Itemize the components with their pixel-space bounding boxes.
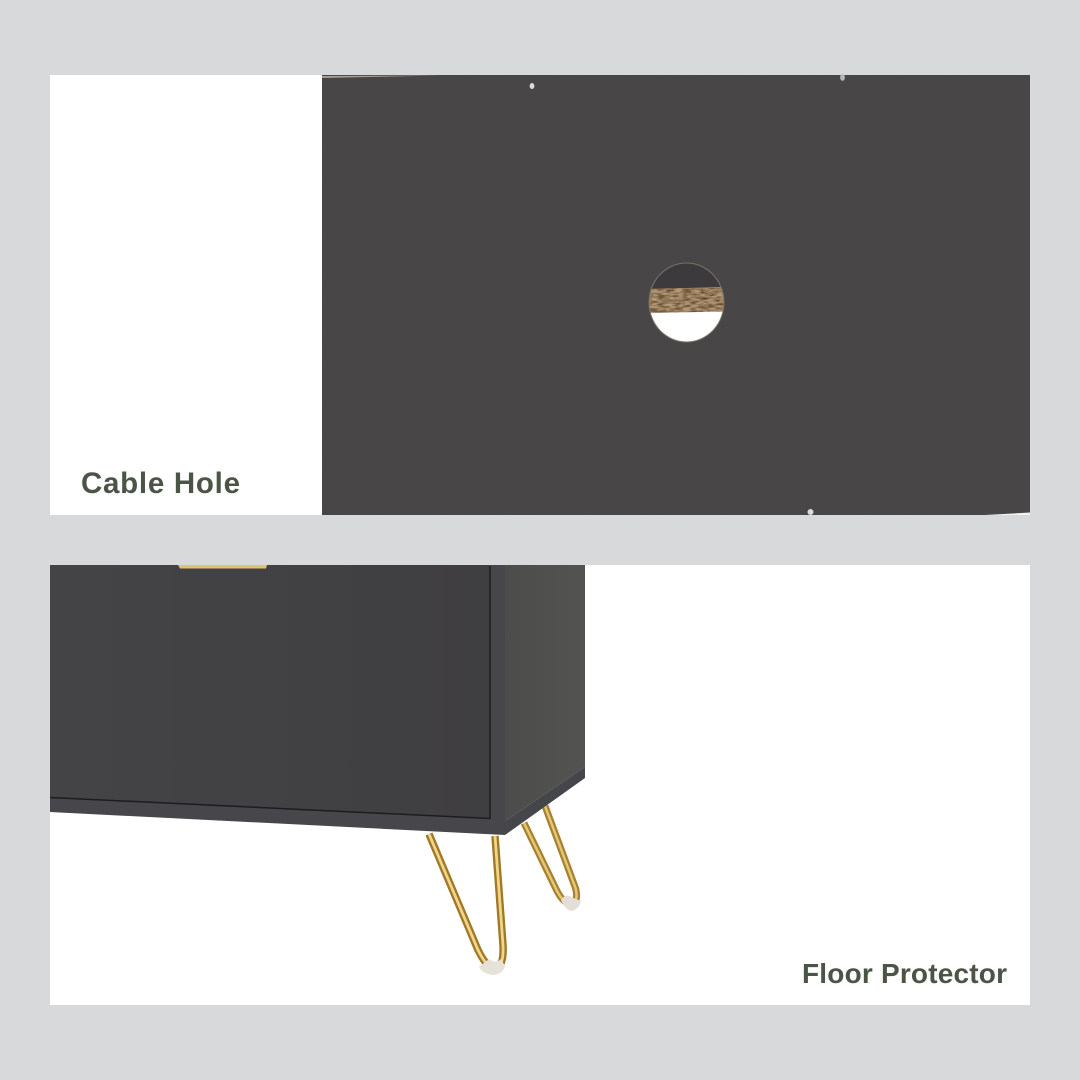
cabinet side lower edge (505, 767, 585, 835)
heading: Cable Hole: Cable Hole (81, 467, 240, 500)
panel: cable hole (50, 74, 1030, 515)
icon: cable hole (648, 262, 724, 342)
panel: floor protector (50, 565, 1030, 1005)
dark cabinet back (322, 75, 1030, 515)
cabinet frame (50, 565, 505, 835)
white panel background (50, 565, 1030, 1005)
screw dots (530, 74, 845, 515)
gold handle (178, 565, 267, 568)
cabinet body (50, 565, 585, 835)
drawer outline (50, 566, 490, 818)
cabinet side (505, 565, 585, 821)
white label area (50, 75, 322, 515)
infographic canvas (50, 74, 1030, 1005)
icon: back hairpin leg (524, 806, 581, 911)
drawer front (50, 565, 490, 818)
icon: front hairpin leg (429, 834, 505, 975)
heading: Floor Protector: Floor Protector (802, 958, 1007, 989)
